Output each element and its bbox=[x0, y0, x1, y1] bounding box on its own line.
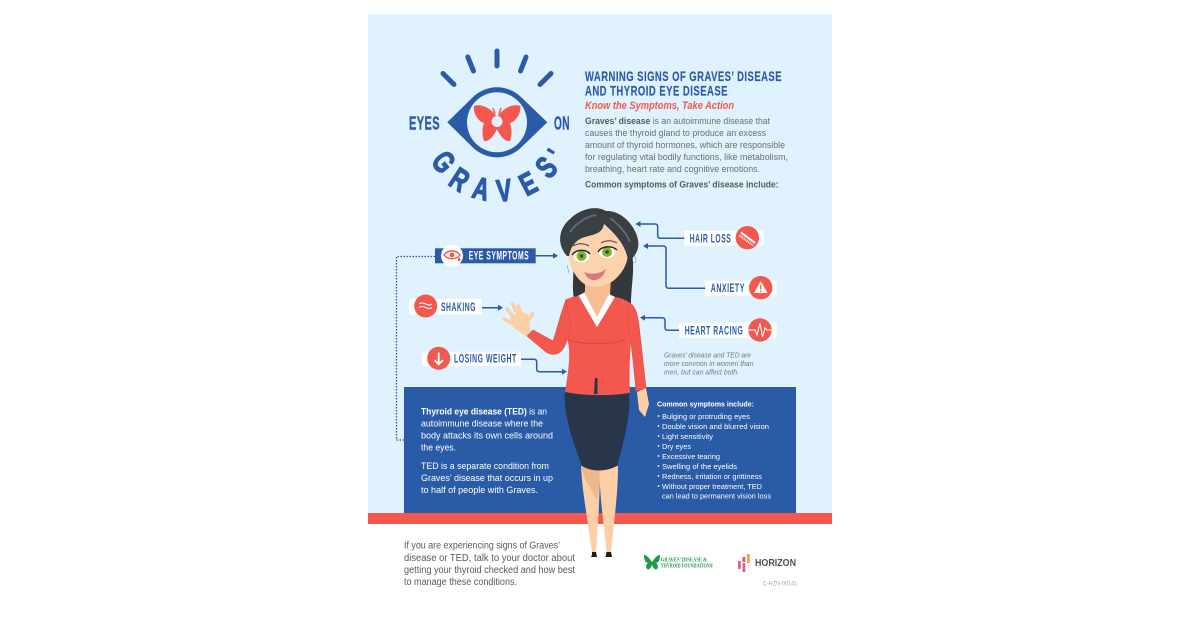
white collar bbox=[579, 294, 615, 327]
document code: C-HZN-00141 bbox=[763, 582, 798, 588]
text block: Graves' disease intro: Graves’ disease is an autoimmune disease that bbox=[585, 116, 770, 127]
right sleeve bbox=[628, 302, 646, 391]
text block: Graves' disease intro bbox=[585, 116, 788, 190]
logo: Horizon: HORIZON bbox=[755, 558, 796, 569]
callout: anxiety: ANXIETY bbox=[711, 283, 745, 295]
logo: Graves' Disease and Thyroid Foundation bbox=[644, 555, 713, 570]
jacket bbox=[565, 296, 631, 395]
arrow: anxiety bbox=[645, 246, 705, 288]
text block: thyroid eye disease definition: body attacks its own cells around bbox=[421, 430, 553, 442]
icon: heartbeat bbox=[748, 323, 772, 337]
panel: light blue background bbox=[368, 14, 832, 514]
callout: hair loss bbox=[684, 226, 763, 249]
arrow: eye symptoms bbox=[536, 255, 556, 257]
list: common TED symptoms: Redness, irritation or grittiness bbox=[662, 472, 762, 481]
panel: thyroid eye disease blue box bbox=[404, 387, 796, 514]
text block: Graves' disease intro: Common symptoms of Graves’ disease include: bbox=[585, 180, 778, 190]
face bbox=[568, 226, 628, 287]
text block: talk to your doctor bbox=[404, 540, 575, 588]
dotted connector from eye symptoms to TED box bbox=[396, 256, 435, 440]
icon: eye bbox=[444, 251, 461, 261]
icon: warning triangle bbox=[754, 281, 768, 293]
callout: losing weight: LOSING WEIGHT bbox=[454, 354, 517, 366]
logo: Horizon bbox=[738, 554, 796, 572]
note: prevalence: men, but can affect both. bbox=[664, 368, 739, 376]
list: common TED symptoms: Common symptoms include: bbox=[657, 400, 754, 408]
text block: talk to your doctor: to manage these conditions. bbox=[404, 577, 517, 588]
heading bbox=[585, 68, 782, 98]
text block: talk to your doctor: If you are experiencing signs of Graves’ bbox=[404, 540, 560, 552]
logo word: GRAVES' bbox=[425, 144, 570, 209]
callout: shaking: SHAKING bbox=[441, 302, 476, 314]
list: common TED symptoms: Without proper treatment, TED bbox=[662, 482, 762, 491]
callout: hair loss: HAIR LOSS bbox=[690, 233, 731, 245]
logo word: GRAVES': ' bbox=[542, 145, 570, 163]
logo word: GRAVES': R bbox=[443, 161, 475, 199]
back hair bbox=[571, 254, 633, 304]
text block: thyroid eye disease definition: Graves’ disease that occurs in up bbox=[421, 473, 553, 484]
callout: losing weight bbox=[422, 347, 521, 370]
heading: WARNING SIGNS OF GRAVES’ DISEASE bbox=[585, 68, 782, 84]
callout: heart racing bbox=[679, 318, 777, 342]
text block: thyroid eye disease definition: the eyes. bbox=[421, 442, 456, 454]
logo word: GRAVES': A bbox=[469, 170, 493, 208]
callout: heart racing: HEART RACING bbox=[685, 325, 743, 337]
text block: thyroid eye disease definition: to half of people with Graves. bbox=[421, 485, 538, 496]
left hand bbox=[504, 304, 532, 336]
logo: Graves' Disease and Thyroid Foundation: GRAVES’ DISEASE & bbox=[661, 558, 707, 564]
callout: eye symptoms: EYE SYMPTOMS bbox=[469, 251, 529, 263]
text block: Graves' disease intro: causes the thyroid gland to produce an excess bbox=[585, 128, 766, 139]
icon: waves bbox=[419, 303, 432, 308]
subheading: Know the Symptoms, Take Action bbox=[585, 100, 734, 112]
heading: AND THYROID EYE DISEASE bbox=[585, 82, 728, 98]
icon: comb bbox=[740, 232, 755, 246]
list: common TED symptoms: Double vision and blurred vision bbox=[662, 422, 769, 431]
text block: thyroid eye disease definition: TED is a separate condition from bbox=[421, 461, 549, 472]
right hand bbox=[637, 388, 649, 417]
text block: Graves' disease intro: amount of thyroid hormones, which are responsible bbox=[585, 140, 785, 151]
text block: thyroid eye disease definition: autoimmune disease where the bbox=[421, 418, 543, 430]
list: common TED symptoms: Bulging or protruding eyes bbox=[662, 412, 750, 421]
eyes bbox=[572, 241, 617, 262]
front hair bbox=[560, 208, 638, 262]
arrow: losing weight bbox=[521, 359, 565, 372]
hair wisps bbox=[567, 256, 636, 273]
arrow: shaking bbox=[482, 307, 501, 309]
text block: thyroid eye disease definition: Thyroid eye disease (TED) is an bbox=[421, 406, 547, 418]
callout: anxiety bbox=[705, 276, 777, 299]
mouth bbox=[584, 269, 606, 280]
callout: shaking bbox=[409, 294, 482, 318]
text block: thyroid eye disease definition bbox=[421, 406, 553, 496]
logo: Eyes on Graves' bbox=[409, 51, 570, 209]
note: prevalence: more common in women than bbox=[664, 359, 754, 368]
logo word: GRAVES': V bbox=[495, 173, 513, 209]
callout: eye symptoms bbox=[435, 245, 536, 267]
list: common TED symptoms bbox=[657, 400, 771, 500]
left sleeve bbox=[527, 300, 571, 354]
logo word: GRAVES': G bbox=[425, 144, 462, 180]
logo word: GRAVES': E bbox=[514, 165, 543, 203]
list: common TED symptoms: can lead to permanent vision loss bbox=[662, 492, 771, 500]
list: common TED symptoms: Light sensitivity bbox=[662, 432, 713, 441]
note: prevalence bbox=[664, 350, 754, 376]
list: common TED symptoms: Swelling of the eyelids bbox=[662, 462, 737, 471]
logo word: EYES: EYES bbox=[409, 114, 440, 134]
illustration: woman bbox=[504, 208, 649, 557]
text block: Graves' disease intro: for regulating vital bodily functions, like metabolism, bbox=[585, 152, 788, 163]
neck bbox=[585, 276, 611, 318]
arrow: heart racing bbox=[642, 318, 679, 330]
icon: eye with butterfly bbox=[447, 87, 547, 157]
text block: talk to your doctor: disease or TED, talk to your doctor about bbox=[404, 553, 575, 564]
legs bbox=[581, 466, 618, 557]
icon: down arrow bbox=[434, 352, 443, 364]
note: prevalence: Graves’ disease and TED are bbox=[664, 350, 751, 360]
skirt bbox=[565, 391, 629, 470]
text block: Graves' disease intro: breathing, heart rate and cognitive emotions. bbox=[585, 164, 760, 175]
logo word: GRAVES': S bbox=[529, 150, 564, 185]
icon: eye rays bbox=[443, 51, 551, 84]
logo word: ON: ON bbox=[554, 114, 570, 134]
text block: talk to your doctor: getting your thyroid checked and how best bbox=[404, 565, 575, 576]
list: common TED symptoms: Excessive tearing bbox=[662, 452, 720, 461]
red footer band bbox=[368, 513, 832, 524]
list: common TED symptoms: Dry eyes bbox=[662, 442, 691, 451]
logo: Graves' Disease and Thyroid Foundation: THYROID FOUNDATION® bbox=[661, 562, 713, 569]
arrow: hair loss bbox=[638, 224, 684, 238]
